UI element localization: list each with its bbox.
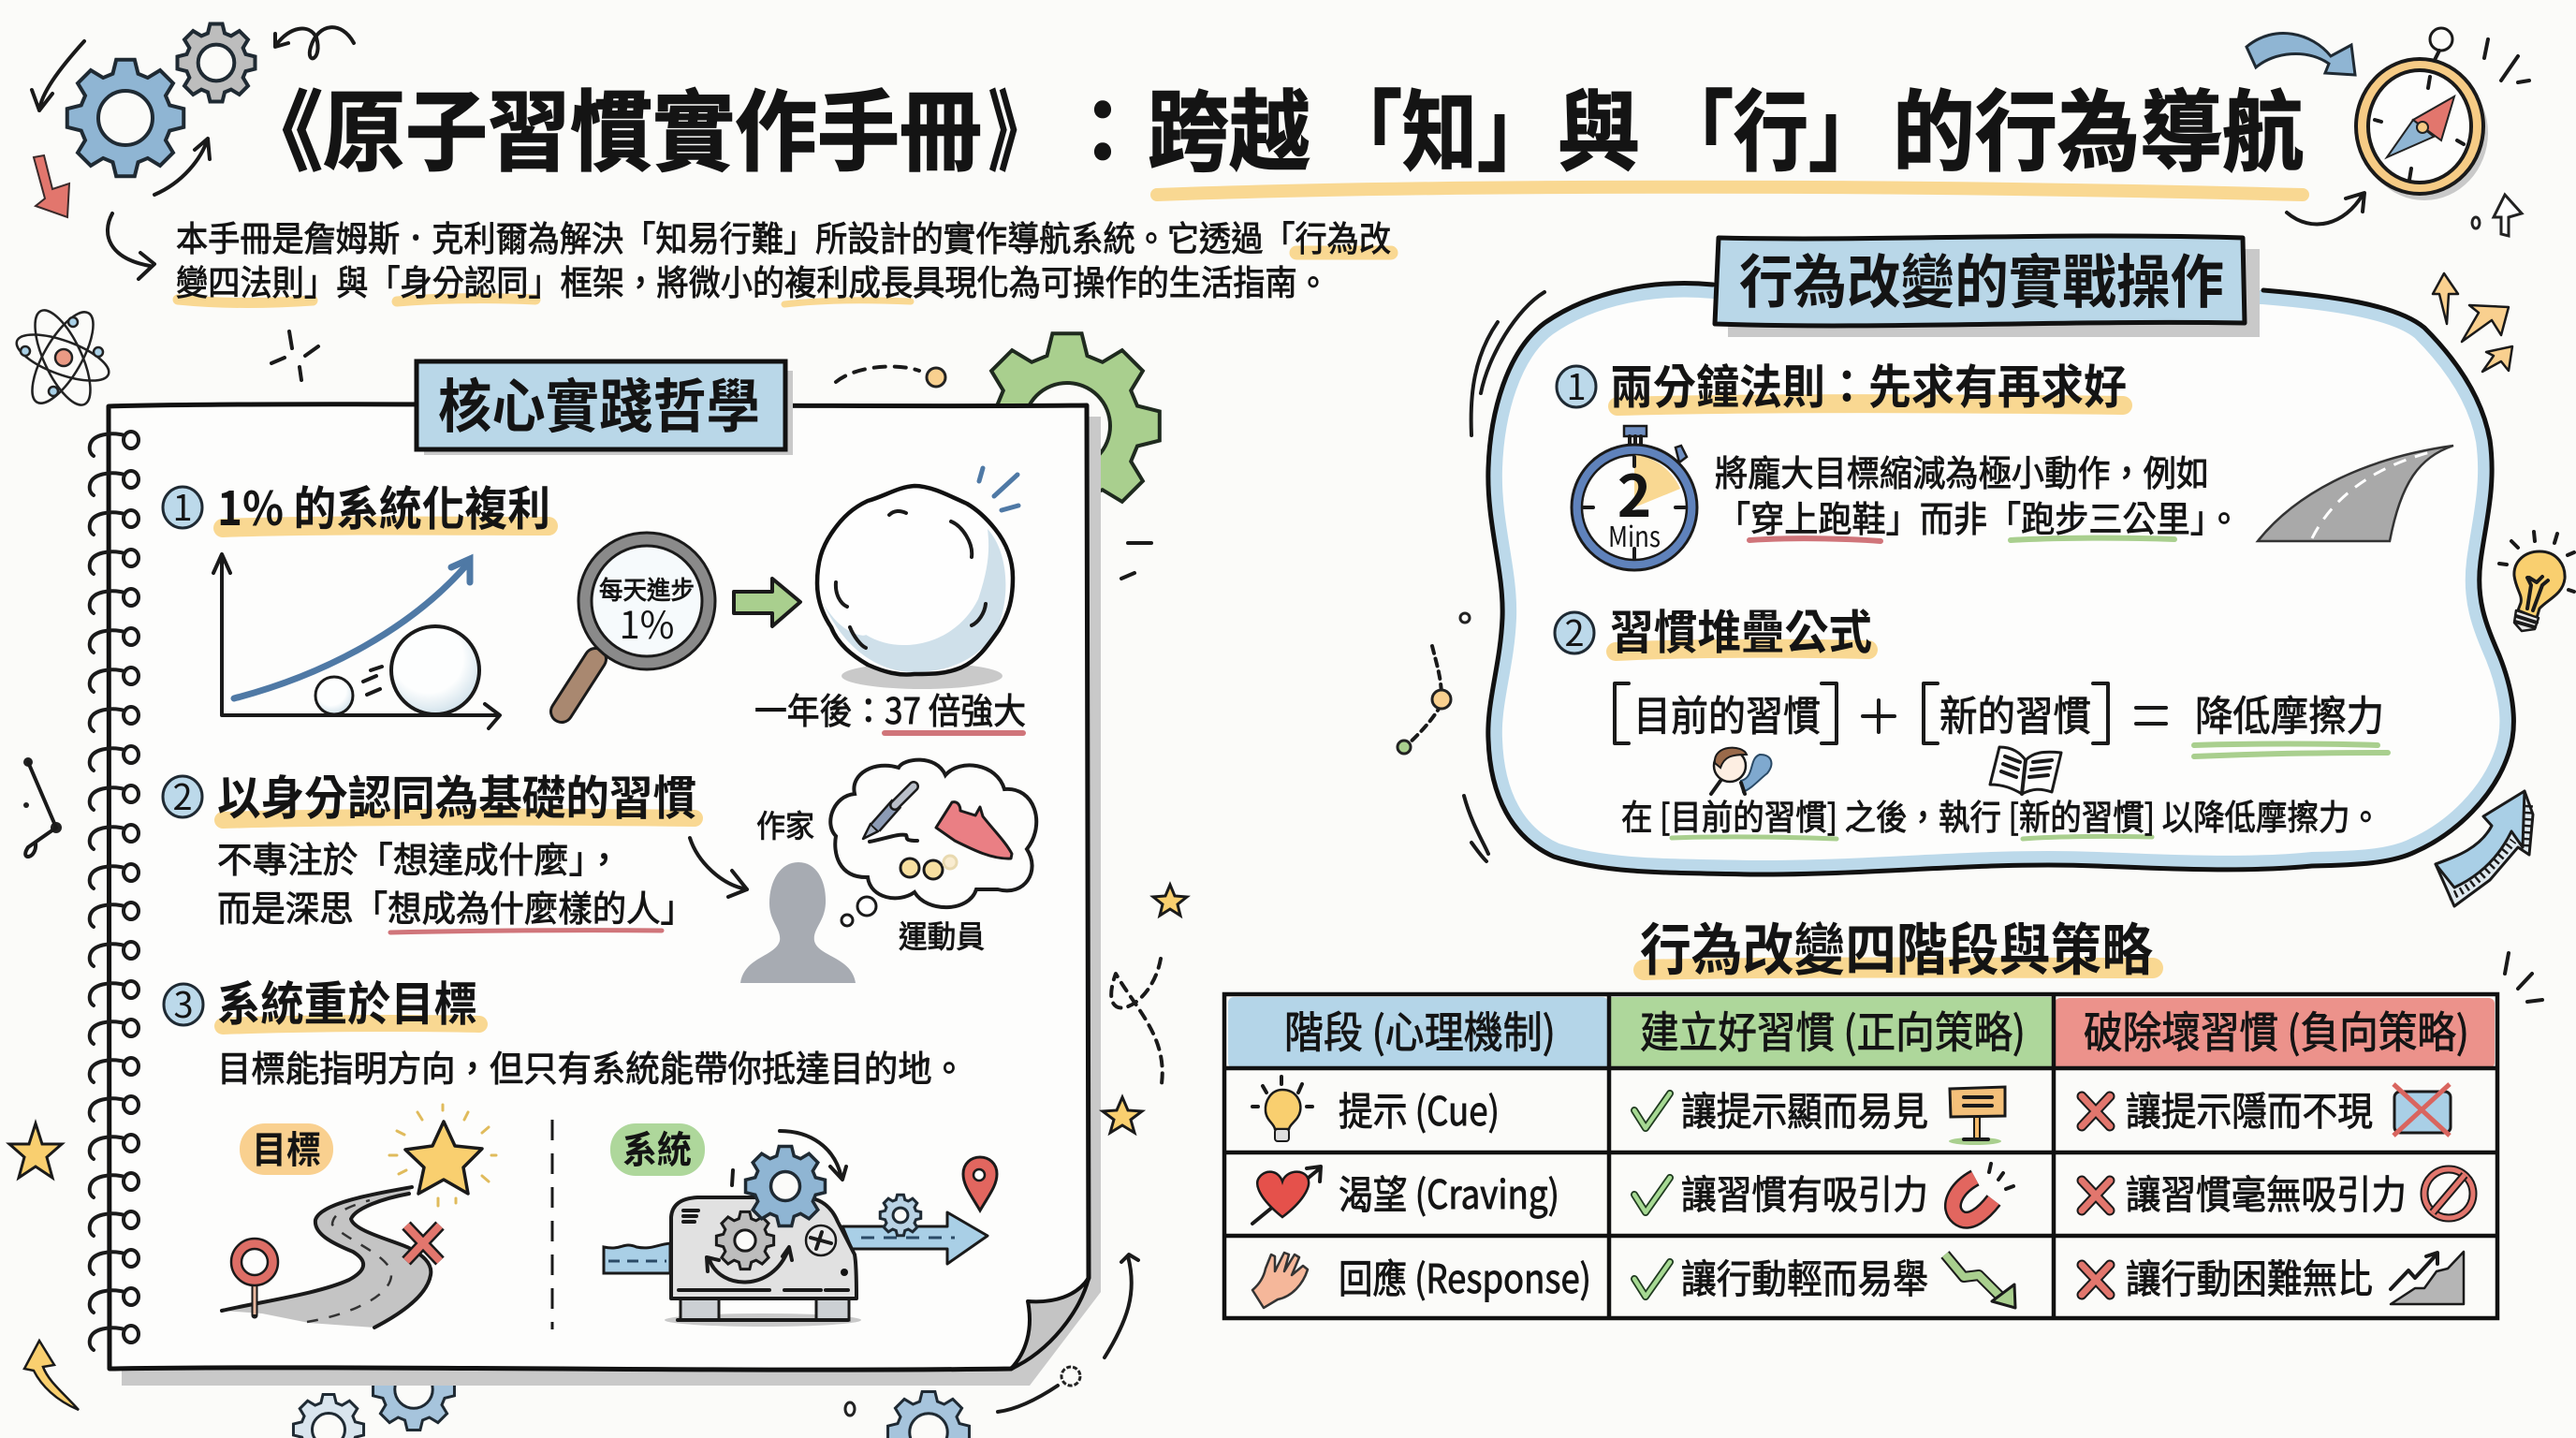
decoration: top-left gears and arrows bbox=[32, 24, 354, 279]
icon: person silhouette bbox=[740, 862, 856, 983]
bracket: current habit bbox=[1615, 683, 1837, 743]
icon: star with rays bbox=[389, 1105, 496, 1206]
number badge 2: 2 bbox=[172, 769, 193, 820]
icon: stopwatch: Mins bbox=[1608, 514, 1661, 555]
arrow: blue curved arrow bbox=[2247, 34, 2355, 75]
title: ： bbox=[1061, 62, 1144, 189]
intro paragraph bbox=[176, 211, 1391, 305]
check bbox=[1634, 1093, 1670, 1128]
heading tab: core philosophy: 核心實踐哲學 bbox=[438, 360, 760, 444]
good strategy: 讓習慣有吸引力 bbox=[1681, 1164, 1928, 1221]
arrow: red down bbox=[34, 155, 69, 217]
row: cue bbox=[1252, 1077, 2451, 1145]
decoration: bottom gears bbox=[293, 1349, 969, 1438]
number badge 3: 3 bbox=[173, 976, 194, 1028]
title: 《原子習慣實作手冊 bbox=[241, 62, 982, 189]
decoration: dot bbox=[2472, 217, 2480, 228]
decoration: sparks near table bbox=[2505, 953, 2542, 1002]
icon: signpost bbox=[1949, 1087, 2005, 1145]
underlines bbox=[1749, 538, 2174, 541]
section 2: identity habits bbox=[163, 760, 1036, 983]
arrow: intro curve bbox=[108, 213, 154, 279]
intro line 1: 本手冊是詹姆斯．克利爾為解決「知易行難」所設計的實作導航系統。它透過「行為改 bbox=[176, 211, 1391, 261]
number badge 1 bbox=[163, 479, 202, 531]
icon: grey gear bbox=[178, 24, 255, 101]
body line 1: 不專注於「想達成什麼」， bbox=[217, 831, 622, 883]
title: 「知」 bbox=[1327, 62, 1552, 189]
icon: downhill arrow bbox=[1945, 1255, 2015, 1308]
title: 與 bbox=[1558, 62, 1640, 189]
blob outline bbox=[1488, 284, 2513, 874]
term: reduce friction: 降低摩擦力 bbox=[2195, 682, 2384, 742]
sentence: 在 [目前的習慣] 之後，執行 [新的習慣] 以降低摩擦力。 bbox=[1621, 789, 2381, 840]
divider bbox=[550, 1120, 554, 1329]
decoration: constellation bbox=[1398, 613, 1470, 754]
section 2: habit stacking bbox=[1555, 595, 2388, 840]
number badge 2 bbox=[1555, 605, 1594, 656]
blob background bbox=[1488, 284, 2513, 874]
label: 提示 (Cue) bbox=[1339, 1080, 1500, 1137]
icon: start pin bbox=[231, 1239, 278, 1315]
heading: 兩分鐘法則：先求有再求好 bbox=[1610, 350, 2127, 418]
heading highlight bbox=[223, 817, 695, 820]
title underline bbox=[1157, 187, 2303, 195]
number badge 2: 2 bbox=[1564, 605, 1585, 656]
illustration: system machine bbox=[604, 1131, 988, 1327]
bad strategy: 讓習慣毫無吸引力 bbox=[2126, 1164, 2407, 1221]
body line 2: 「穿上跑鞋」而非「跑步三公里」。 bbox=[1717, 491, 2241, 542]
icon: magnet bbox=[1953, 1164, 2013, 1220]
label: writer: 作家 bbox=[756, 801, 814, 846]
cross bbox=[2082, 1096, 2110, 1126]
decoration: dashed arc with dot bbox=[836, 367, 945, 387]
title: 》 bbox=[988, 62, 1046, 189]
heading tab: practice: 行為改變的實戰操作 bbox=[1739, 235, 2224, 319]
icon: stopwatch bbox=[1572, 426, 1697, 570]
title: 「行」 bbox=[1659, 62, 1883, 189]
highlights bbox=[178, 253, 1391, 304]
section 1: two-minute rule bbox=[1557, 350, 2453, 570]
table grid bbox=[1224, 994, 2497, 1318]
icon: hand bbox=[1252, 1253, 1308, 1308]
label: athlete: 運動員 bbox=[899, 912, 985, 957]
icon: small white arrow bbox=[2494, 195, 2522, 236]
icon: uphill mountain bbox=[2391, 1252, 2464, 1304]
term: current habit: 目前的習慣 bbox=[1633, 682, 1821, 742]
heading: 1% 的系統化複利 bbox=[217, 472, 550, 539]
arrow: to person bbox=[690, 838, 747, 897]
body line 1: 將龐大目標縮減為極小動作，例如 bbox=[1715, 445, 2209, 496]
bracket: new habit bbox=[1924, 683, 2108, 743]
table header fills bbox=[1228, 997, 2495, 1068]
body line 2: 而是深思「想成為什麼樣的人」 bbox=[217, 880, 695, 932]
icon: stopwatch: 2 bbox=[1617, 449, 1651, 534]
result underline bbox=[885, 730, 1023, 736]
panel: core philosophy notebook bbox=[90, 360, 1101, 1386]
icon: heart and arrow bbox=[1252, 1167, 1321, 1224]
header: negative strategy: 破除壞習慣 (負向策略) bbox=[2084, 999, 2469, 1061]
icon: light bulb bbox=[2499, 532, 2574, 631]
heading highlight bbox=[1616, 649, 1868, 652]
icon: magnifying glass: 每天進步 bbox=[599, 570, 695, 607]
number badge 1 bbox=[1557, 359, 1596, 410]
notebook page bbox=[109, 404, 1089, 1370]
decoration: marks around right panel bbox=[1398, 273, 2574, 1002]
check bbox=[1634, 1178, 1670, 1212]
decoration: atom bbox=[11, 303, 114, 412]
icon: prohibition sign bbox=[2424, 1169, 2473, 1218]
heading: 習慣堆疊公式 bbox=[1610, 595, 1872, 663]
intro line 2: 變四法則」與「身分認同」框架，將微小的複利成長具現化為可操作的生活指南。 bbox=[176, 255, 1329, 305]
decoration: left margin items bbox=[9, 757, 79, 1410]
header: positive strategy: 建立好習慣 (正向策略) bbox=[1640, 999, 2026, 1061]
section: four stages table bbox=[1224, 905, 2497, 1318]
icon: pen bbox=[863, 786, 917, 842]
decoration: sparkle bbox=[271, 331, 318, 380]
title: 的行為導航 bbox=[1893, 62, 2305, 189]
table heading highlight bbox=[1644, 968, 2153, 970]
arrow: cycle left bbox=[32, 41, 84, 110]
panel shadow bbox=[122, 417, 1101, 1386]
underline bbox=[390, 931, 662, 932]
title: 跨越 bbox=[1148, 62, 1310, 189]
result text: 一年後：37 倍強大 bbox=[754, 682, 1026, 734]
panel: behavior change in practice bbox=[1488, 235, 2513, 874]
page curl bbox=[1011, 1278, 1089, 1369]
icon: person brushing teeth bbox=[1711, 748, 1771, 794]
underlines bbox=[1672, 836, 2152, 839]
heading highlight bbox=[223, 526, 549, 528]
decoration: items right of notebook bbox=[845, 543, 1187, 1416]
icon: blue gear bbox=[67, 60, 183, 176]
heading highlight bbox=[223, 1023, 479, 1026]
formula bbox=[1615, 682, 2388, 756]
row: response bbox=[1252, 1248, 2464, 1308]
spiral binding bbox=[90, 432, 139, 1350]
header: stage: 階段 (心理機制) bbox=[1284, 999, 1556, 1061]
label: 渴望 (Craving) bbox=[1339, 1164, 1559, 1221]
body text: 目標能指明方向，但只有系統能帶你抵達目的地。 bbox=[217, 1040, 966, 1092]
number badge 3 bbox=[164, 976, 203, 1028]
check bbox=[1634, 1262, 1670, 1297]
plus bbox=[1863, 700, 1895, 732]
illustration: road to horizon bbox=[2258, 446, 2453, 541]
icon: magnifying glass: 1% bbox=[619, 595, 675, 650]
heading: 以身分認同為基礎的習慣 bbox=[217, 761, 696, 829]
icon: glasses bbox=[900, 856, 957, 879]
arrow: cycle right bbox=[154, 139, 210, 195]
arrow: under compass bbox=[2287, 193, 2364, 225]
arrow: big blue up-right bbox=[2436, 791, 2533, 906]
double underline bbox=[2194, 743, 2388, 756]
icon: big snowball bbox=[817, 468, 1018, 689]
good strategy: 讓提示顯而易見 bbox=[1681, 1080, 1928, 1137]
section 1: compound interest bbox=[163, 468, 1026, 734]
arrow: green bbox=[734, 579, 800, 626]
number badge 1: 1 bbox=[172, 479, 193, 531]
system pill: 系統 bbox=[622, 1120, 692, 1174]
icon: crossed phone bbox=[2393, 1084, 2451, 1136]
heading: 系統重於目標 bbox=[217, 967, 477, 1034]
icon: red x bbox=[406, 1225, 440, 1261]
arrow: loop bbox=[275, 27, 354, 58]
icon: open book bbox=[1990, 747, 2061, 794]
cross bbox=[2082, 1265, 2110, 1295]
icon: magnifying glass bbox=[562, 533, 715, 712]
icon: thought cloud bbox=[830, 760, 1036, 926]
heading highlight bbox=[1617, 404, 2123, 406]
bad strategy: 讓提示隱而不現 bbox=[2126, 1080, 2373, 1137]
equals bbox=[2136, 708, 2166, 724]
label: 回應 (Response) bbox=[1339, 1248, 1591, 1305]
term: new habit: 新的習慣 bbox=[1939, 682, 2091, 742]
table heading: 行為改變四階段與策略 bbox=[1640, 905, 2153, 987]
decoration: sparks bbox=[2484, 39, 2529, 82]
number badge 1: 1 bbox=[1566, 359, 1587, 410]
arrows: yellow up bbox=[2433, 273, 2512, 372]
cross bbox=[2082, 1181, 2110, 1211]
row: craving bbox=[1252, 1164, 2473, 1224]
icon: running shoe bbox=[936, 802, 1012, 858]
number badge 2 bbox=[163, 769, 202, 820]
good strategy: 讓行動輕而易舉 bbox=[1681, 1248, 1928, 1305]
goal pill: 目標 bbox=[252, 1120, 321, 1174]
icon: bulb bbox=[1252, 1077, 1312, 1141]
illustration: winding road bbox=[222, 1187, 431, 1328]
icon: compass body bbox=[2356, 28, 2488, 200]
icon: destination pin bbox=[963, 1157, 997, 1211]
title bbox=[241, 62, 2305, 189]
decoration: compass bbox=[2247, 28, 2529, 236]
bad strategy: 讓行動困難無比 bbox=[2126, 1248, 2373, 1305]
chart: growth curve with snowballs bbox=[213, 554, 500, 728]
icon: green gear bbox=[974, 333, 1160, 519]
section 3: systems over goals bbox=[164, 967, 997, 1329]
